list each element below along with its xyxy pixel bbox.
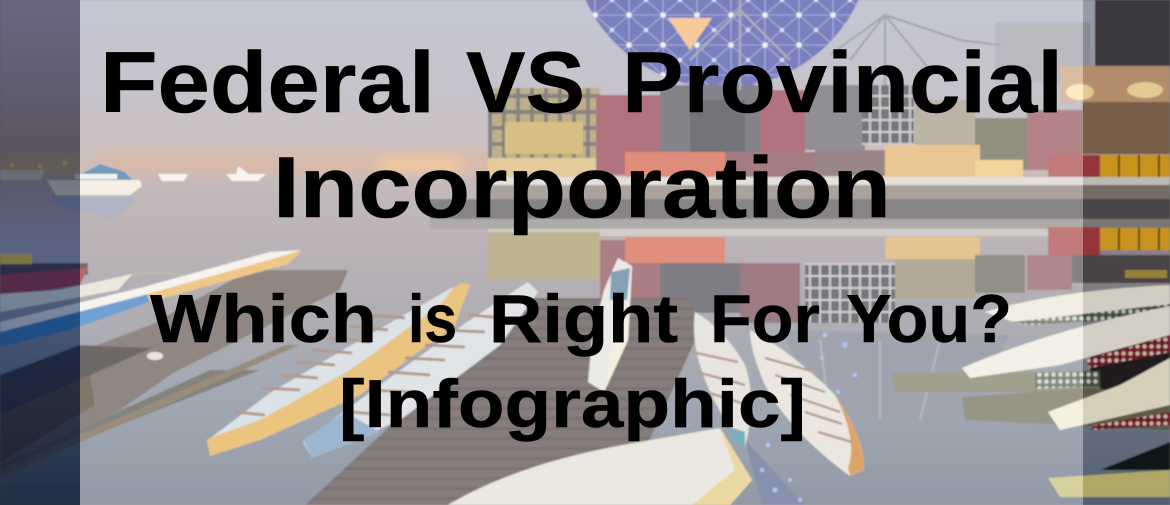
title line 2: Incorporation: [273, 140, 891, 236]
darker right edge band: [1083, 0, 1170, 505]
title and subtitle: [100, 35, 1063, 442]
title line 1: VS: [466, 35, 585, 131]
waterfront buildings: [488, 0, 1170, 180]
subtitle line 1: You?: [846, 281, 1012, 357]
promenade and seawall: [430, 177, 1170, 229]
building reflection in water: [488, 227, 1170, 323]
upright boat on dock: [588, 258, 632, 392]
central wooden dock: [305, 298, 700, 505]
small boats in the harbour: [0, 160, 266, 220]
left dock: [0, 254, 348, 478]
docks and white racing shells on the right: [890, 285, 1170, 497]
two white boats on the right of the dock: [692, 312, 864, 476]
overturned white boat foreground: [448, 428, 752, 505]
subtitle line 2: [Infographic]: [339, 366, 806, 442]
subtitle line 1: For: [710, 281, 820, 357]
dragon boat blue: [303, 282, 538, 458]
title line 1: Federal: [100, 35, 435, 131]
blue light reflections: [760, 332, 857, 502]
title line 1: [100, 35, 1063, 131]
dome reflection: [745, 330, 1010, 505]
subtitle line 1: is: [408, 281, 457, 357]
darker left edge band: [0, 0, 80, 505]
subtitle line 1: [150, 281, 1012, 357]
science dome with lights: [572, 0, 872, 88]
outrigger canoe blue and yellow: [0, 250, 302, 347]
subtitle line 1: Right: [489, 281, 678, 357]
subtitle line 1: Which: [150, 281, 377, 357]
dragon boat orange: [207, 283, 470, 456]
distant fog lights on horizon: [0, 152, 490, 174]
title line 1: Provincial: [622, 35, 1063, 131]
